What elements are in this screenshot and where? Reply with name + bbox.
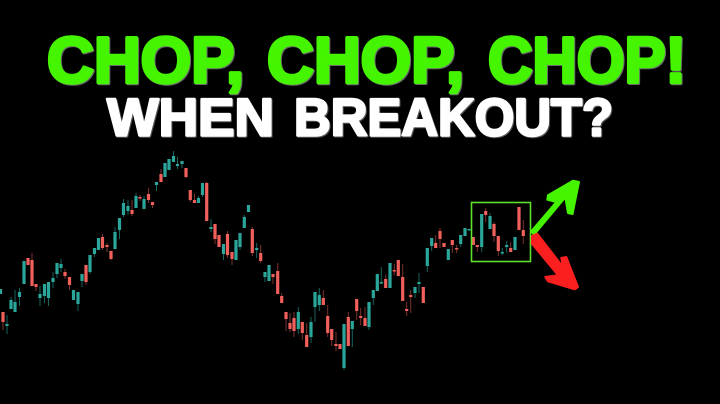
arrow: breakdown <box>532 234 578 289</box>
subtitle: when breakout: WHEN <box>107 89 274 148</box>
subtitle: when breakout: BREAKOUT? <box>294 89 613 148</box>
candlestick chart <box>0 151 523 370</box>
title: chop chop chop: CHOP, <box>47 24 244 96</box>
highlight box: consolidation range <box>472 202 530 262</box>
title: chop chop chop: CHOP, <box>267 24 464 96</box>
title: chop chop chop <box>47 24 686 96</box>
arrow: breakout up <box>531 181 579 235</box>
title: chop chop chop: CHOP! <box>488 24 686 96</box>
subtitle: when breakout <box>107 89 613 148</box>
